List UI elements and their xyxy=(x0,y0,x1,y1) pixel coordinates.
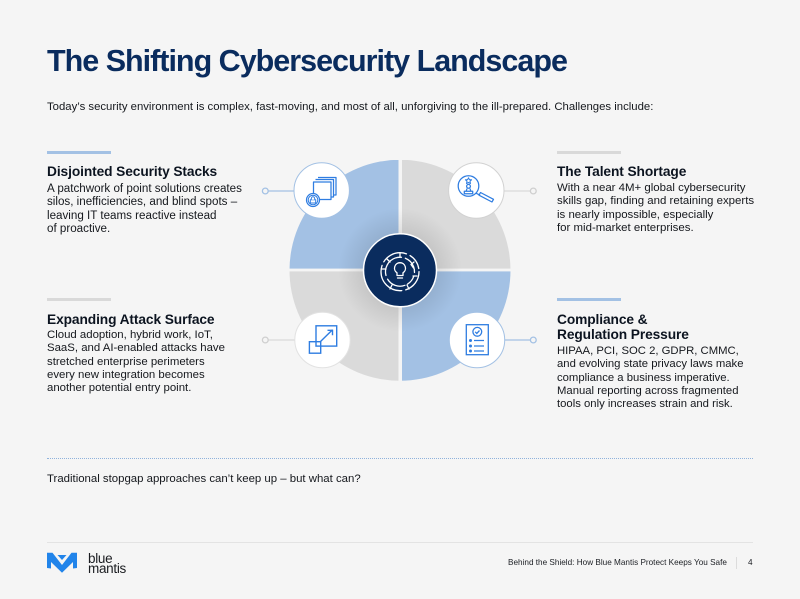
dotted divider xyxy=(47,458,753,459)
text: compliance and regulation pressure: tools only increases strain and risk. xyxy=(557,398,733,410)
text: talent shortage: With a near 4M+ global cybersecurity xyxy=(557,182,745,194)
logo wordmark xyxy=(88,551,126,576)
logo wordmark: mantis xyxy=(88,560,126,576)
footer separator xyxy=(736,557,737,569)
heading: compliance and regulation pressure xyxy=(557,312,689,342)
panel: compliance and regulation pressure xyxy=(557,298,744,410)
connector: bottom left xyxy=(262,337,296,343)
logo: blue mantis xyxy=(47,551,126,576)
text: disjointed security stacks: silos, inefficiencies, and blind spots – xyxy=(47,195,237,208)
icon: expanding squares with arrow xyxy=(295,312,350,368)
closing statement: Traditional stopgap approaches can’t keep up – but what can? xyxy=(47,473,361,485)
connector: top left xyxy=(262,188,295,194)
icon: central maze with lightbulb xyxy=(364,234,436,307)
text: compliance and regulation pressure: and evolving state privacy laws make xyxy=(557,358,744,370)
text: compliance and regulation pressure xyxy=(557,345,744,410)
heading: compliance and regulation pressure: Compliance & xyxy=(557,312,648,327)
logo wordmark: blue xyxy=(88,551,112,566)
logo mark xyxy=(47,552,77,573)
central quadrant diagram xyxy=(262,160,537,381)
text: expanding attack surface: every new integration becomes xyxy=(47,369,205,381)
panel: disjointed security stacks xyxy=(47,151,242,235)
heading: disjointed security stacks: Disjointed Security Stacks xyxy=(47,164,217,179)
panel: talent shortage xyxy=(557,151,754,234)
text: compliance and regulation pressure: HIPAA, PCI, SOC 2, GDPR, CMMC, xyxy=(557,345,739,357)
heading: expanding attack surface: Expanding Attack Surface xyxy=(47,312,214,327)
icon: checklist document xyxy=(449,312,505,368)
text: talent shortage: for mid-market enterprises. xyxy=(557,222,694,234)
panel: expanding attack surface xyxy=(47,298,225,394)
chart: four quadrants xyxy=(289,160,511,381)
text: expanding attack surface: another potential entry point. xyxy=(47,382,191,394)
text: expanding attack surface: stretched enterprise perimeters xyxy=(47,356,205,368)
text: disjointed security stacks: leaving IT teams reactive instead xyxy=(47,209,216,222)
text: disjointed security stacks: of proactive. xyxy=(47,222,110,235)
footer rule xyxy=(47,542,753,543)
connector: top right xyxy=(504,188,536,194)
icon: stacked layers with lock xyxy=(294,163,349,218)
connector: bottom right xyxy=(504,337,536,343)
text: disjointed security stacks xyxy=(47,182,242,235)
title: The Shifting Cybersecurity Landscape xyxy=(47,44,567,78)
text: disjointed security stacks: A patchwork of point solutions creates xyxy=(47,182,242,195)
icon: magnifier over person xyxy=(449,163,504,218)
text: expanding attack surface: SaaS, and AI-enabled attacks have xyxy=(47,342,225,354)
text: talent shortage: is nearly impossible, especially xyxy=(557,209,713,221)
heading: talent shortage: The Talent Shortage xyxy=(557,164,686,179)
text: compliance and regulation pressure: compliance a business imperative. xyxy=(557,372,730,384)
heading: compliance and regulation pressure: Regulation Pressure xyxy=(557,327,689,342)
page number: 4 xyxy=(748,558,753,567)
text: talent shortage: skills gap, finding and retaining experts xyxy=(557,195,754,207)
text: expanding attack surface: Cloud adoption, hybrid work, IoT, xyxy=(47,329,213,341)
intro text: Today’s security environment is complex, fast-moving, and most of all, unforgiving to the ill-prepared. Challenges include: xyxy=(47,101,653,113)
text: expanding attack surface xyxy=(47,329,225,394)
text: compliance and regulation pressure: Manual reporting across fragmented xyxy=(557,385,738,397)
footer caption: Behind the Shield: How Blue Mantis Protect Keeps You Safe xyxy=(508,558,727,567)
text: talent shortage xyxy=(557,182,754,234)
